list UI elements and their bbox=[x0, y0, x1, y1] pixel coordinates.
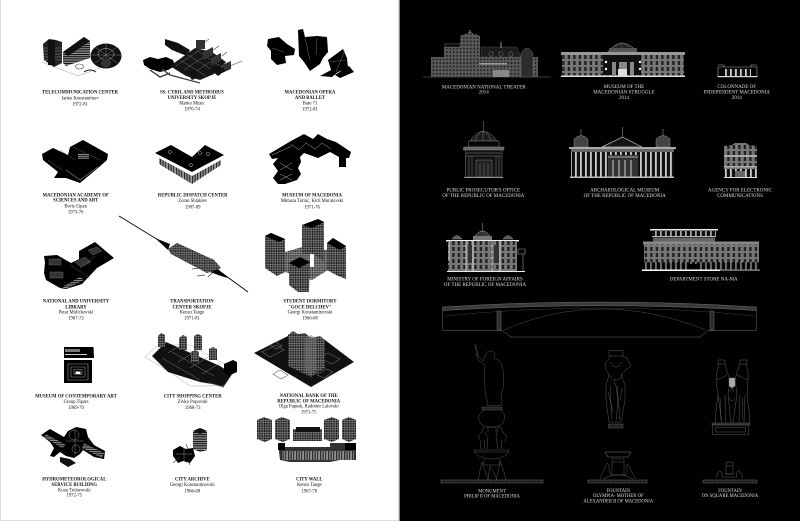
right black panel bbox=[400, 0, 800, 521]
icon: department store na-ma bbox=[642, 229, 760, 271]
label: colonnade of independent macedonia: INDEPENDENT MACEDONIA bbox=[703, 90, 770, 95]
icon: national and university library bbox=[44, 242, 114, 289]
label: transportation center skopje: TRANSPORTATION bbox=[170, 300, 214, 305]
label: museum of macedonia: 1971-76 bbox=[304, 205, 320, 210]
label: colonnade of independent macedonia: 2014 bbox=[732, 96, 742, 101]
label: archaeological museum: ARCHAEOLOGICAL MUSEUM bbox=[590, 189, 660, 194]
label: telecommunication center: 1972-81 bbox=[72, 103, 88, 108]
label: transportation center skopje: Kenzo Tange bbox=[180, 311, 204, 316]
label: student dormitory goce delchev: Georgi Konstantinovski bbox=[288, 311, 333, 316]
label: telecommunication center: TELECOMMUNICATION CENTER bbox=[42, 91, 119, 96]
label: city shopping center: 1968-73 bbox=[185, 406, 201, 411]
label: monument philip ii of macedonia: MONUMENT bbox=[478, 489, 506, 494]
label: colonnade of independent macedonia: COLONNADE OF bbox=[717, 85, 756, 90]
label: republic dispatch center: 1987-89 bbox=[185, 205, 201, 210]
label: fountain olympia: OLYMPIA- MOTHER OF bbox=[593, 494, 644, 499]
label: macedonian opera and ballet: AND BALLET bbox=[295, 96, 326, 101]
label: hydrometeorological service building: HYDROMETEOROLOGICAL bbox=[42, 478, 106, 483]
label: macedonian opera and ballet: Bato 71 bbox=[303, 101, 318, 106]
icon: monument philip ii of macedonia bbox=[441, 345, 543, 483]
label: hydrometeorological service building: SERVICE BUILDING bbox=[52, 483, 97, 488]
label: city archive: 1966-68 bbox=[184, 489, 201, 494]
icon: public prosecutor's office bbox=[464, 121, 504, 178]
label: national bank of the republic of macedonia: 1971-75 bbox=[301, 411, 317, 416]
label: transportation center skopje: CENTER SKOPJE bbox=[173, 305, 211, 310]
label: city wall: CITY WALL bbox=[296, 478, 323, 483]
icon: transportation center skopje bbox=[119, 216, 248, 292]
label: ss cyril and methodius university: SS. CYRIL AND METHODIUS bbox=[160, 91, 224, 96]
label: fountain on square macedonia: FOUNTAIN bbox=[718, 489, 742, 494]
icon: telecommunication center bbox=[42, 37, 122, 76]
label: city wall: 1967-78 bbox=[301, 489, 318, 494]
icon: agency for electronic communications bbox=[724, 143, 757, 178]
label: city shopping center: Zivko Popovski bbox=[178, 400, 208, 405]
label: city wall: Kenzo Tange bbox=[297, 483, 322, 488]
icon: museum of macedonia bbox=[269, 134, 351, 184]
icon: republic dispatch center bbox=[155, 145, 224, 184]
label: macedonian academy of sciences and art: Boris Cipan bbox=[64, 204, 88, 209]
label: student dormitory goce delchev: STUDENT DORMITORY bbox=[283, 300, 337, 305]
icon: city shopping center bbox=[145, 333, 237, 387]
icon: macedonian academy of sciences and art bbox=[42, 140, 108, 183]
label: museum of macedonia: Mimoza Tomic, Kiril Muratovski bbox=[281, 199, 344, 204]
icon: city archive bbox=[173, 428, 207, 465]
label: student dormitory goce delchev: "GOCE DELCHEV" bbox=[288, 305, 332, 310]
label: museum of contemporary art: MUSEUM OF CONTEMPORARY ART bbox=[35, 394, 118, 399]
icon: fountain olympia bbox=[588, 350, 647, 483]
icon: museum of contemporary art bbox=[64, 347, 94, 383]
label: museum of contemporary art: 1969-70 bbox=[68, 406, 84, 411]
label: macedonian academy of sciences and art: MACEDONIAN ACADEMY OF bbox=[43, 194, 109, 199]
label: macedonian opera and ballet: 1972-81 bbox=[302, 108, 318, 113]
label: ministry of foreign affairs: OF THE REPUBLIC OF MACEDONIA bbox=[444, 283, 526, 288]
icon: macedonian opera and ballet bbox=[267, 29, 354, 78]
label: archaeological museum: OF THE REPUBLIC OF MACEDONIA bbox=[584, 194, 666, 199]
icon: hydrometeorological service building bbox=[41, 427, 105, 467]
label: city archive: CITY ARCHIVE bbox=[175, 478, 210, 483]
label: ss cyril and methodius university: 1970-74 bbox=[184, 108, 200, 113]
icon: bridge bbox=[442, 302, 756, 337]
label: hydrometeorological service building: Krsto Todorovski bbox=[58, 488, 91, 493]
label: ss cyril and methodius university: UNIVERSITY SKOPJE bbox=[168, 96, 216, 101]
label: macedonian academy of sciences and art: SCIENCES AND ART bbox=[53, 199, 99, 204]
label: hydrometeorological service building: 1972-75 bbox=[66, 494, 83, 499]
icon: fountain on square macedonia bbox=[703, 360, 757, 483]
label: museum of contemporary art: Group Tipars bbox=[64, 400, 89, 405]
label: macedonian national theater: MACEDONIAN NATIONAL THEATER bbox=[442, 85, 526, 90]
icon: archaeological museum bbox=[569, 127, 676, 178]
label: city archive: Georgi Konstantinovski bbox=[170, 483, 215, 488]
label: museum of macedonia: MUSEUM OF MACEDONIA bbox=[282, 193, 343, 198]
label: public prosecutor's office: OF THE REPUBLIC OF MACEDONIA bbox=[442, 194, 525, 199]
label: national bank of the republic of macedonia: NATIONAL BANK OF THE bbox=[280, 394, 338, 399]
label: fountain olympia: ALEXANDER II OF MACEDONIA bbox=[583, 499, 654, 504]
icon: macedonian national theater bbox=[423, 30, 551, 77]
label: national bank of the republic of macedonia: REPUBLIC OF MACEDONIA bbox=[277, 399, 341, 404]
label: student dormitory goce delchev: 1966-68 bbox=[302, 317, 318, 322]
label: monument philip ii of macedonia: PHILIP II OF MACEDONIA bbox=[464, 494, 520, 499]
label: national and university library: LIBRARY bbox=[65, 305, 87, 310]
label: macedonian national theater: 2014 bbox=[479, 91, 489, 96]
icon: ss cyril and methodius university bbox=[143, 39, 242, 83]
label: museum of the macedonian struggle: 2014 bbox=[619, 96, 630, 101]
icon: ministry of foreign affairs bbox=[446, 223, 525, 272]
icon: colonnade of independent macedonia bbox=[718, 65, 758, 77]
label: macedonian academy of sciences and art: 1973-76 bbox=[68, 211, 84, 216]
icon: city wall bbox=[257, 417, 356, 462]
label: republic dispatch center: Zoran Shtaklev bbox=[178, 199, 208, 204]
label: transportation center skopje: 1971-81 bbox=[184, 317, 200, 322]
label: national and university library: NATIONAL AND UNIVERSITY bbox=[43, 300, 110, 305]
label: city shopping center: CITY SHOPPING CENTER bbox=[164, 394, 222, 399]
icon: student dormitory goce delchev bbox=[265, 219, 346, 292]
label: national and university library: 1967-72 bbox=[68, 317, 84, 322]
label: fountain olympia: FOUNTAIN bbox=[607, 489, 631, 494]
label: fountain on square macedonia: ON SQUARE MACEDONIA bbox=[702, 494, 759, 499]
label: public prosecutor's office: PUBLIC PROSECUTOR'S OFFICE bbox=[446, 189, 520, 194]
left white panel bbox=[0, 0, 399, 521]
label: macedonian opera and ballet: MACEDONIAN OPERA bbox=[285, 91, 336, 96]
label: agency for electronic communications: AGENCY FOR ELECTRONIC bbox=[708, 189, 773, 194]
label: ss cyril and methodius university: Marko Music bbox=[179, 101, 205, 106]
label: republic dispatch center: REPUBLIC DISPATCH CENTER bbox=[158, 193, 228, 198]
label: national bank of the republic of macedonia: Olga Papesh, Radomir Lalovski bbox=[279, 405, 339, 410]
icon: museum of the macedonian struggle bbox=[561, 43, 685, 77]
label: national and university library: Petar Mulickovski bbox=[59, 311, 94, 316]
label: museum of the macedonian struggle: MUSEUM OF THE bbox=[604, 85, 644, 90]
label: museum of the macedonian struggle: MACEDONIAN STRUGGLE bbox=[593, 90, 655, 95]
label: agency for electronic communications: COMMUNICATIONS bbox=[717, 194, 763, 199]
label: ministry of foreign affairs: MINISTRY OF FOREIGN AFFAIRS bbox=[447, 278, 523, 283]
label: department store na-ma: DEPARTMENT STORE NA-MA bbox=[670, 278, 738, 283]
icon: national bank of the republic of macedonia bbox=[254, 331, 354, 387]
label: telecommunication center: Janko Konstantinov bbox=[61, 96, 99, 101]
